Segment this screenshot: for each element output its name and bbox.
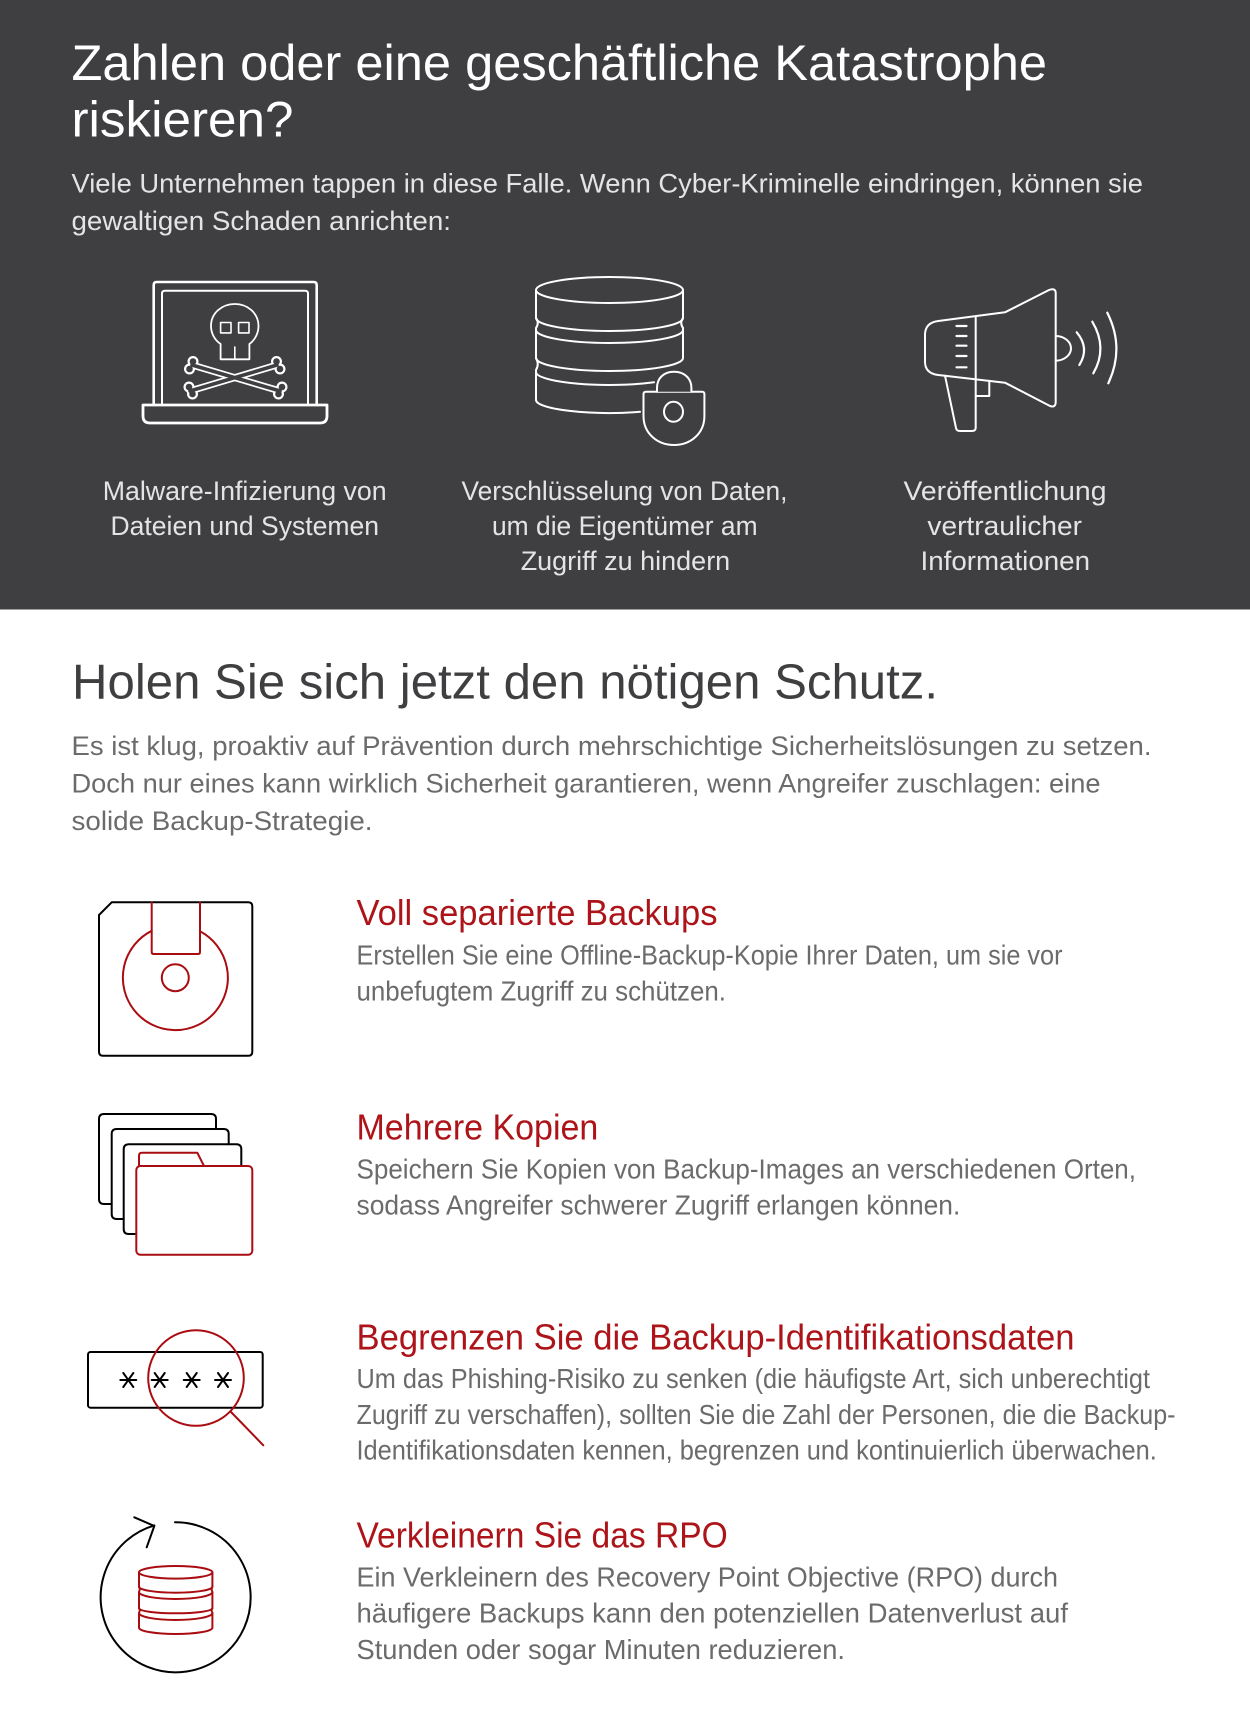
section: limit credentials — [356, 1316, 1176, 1466]
section: limit credentials: Identifikationsdaten kennen, begrenzen und kontinuierlich überwachen. — [356, 1435, 1157, 1466]
section: limit credentials: Begrenzen Sie die Backup-Identifikationsdaten — [356, 1316, 1074, 1357]
icon: password with magnifier — [88, 1330, 263, 1445]
caption: encryption — [462, 476, 788, 576]
intro paragraph: Doch nur eines kann wirklich Sicherheit garantieren, wenn Angreifer zuschlagen: eine — [72, 769, 1100, 799]
title: Zahlen oder eine geschäftliche Katastrophe — [72, 35, 1047, 91]
caption: malware: Malware-Infizierung von — [103, 476, 387, 506]
title: riskieren? — [72, 92, 294, 148]
intro text — [72, 168, 1143, 236]
section: reduce RPO — [356, 1515, 1068, 1665]
section: reduce RPO: Ein Verkleinern des Recovery Point Objective (RPO) durch — [356, 1562, 1058, 1593]
caption: encryption: Zugriff zu hindern — [521, 546, 730, 576]
caption: publication: Informationen — [920, 546, 1090, 576]
icon: stacked folders — [99, 1114, 252, 1255]
icon: database with padlock — [536, 277, 704, 445]
section: separated backups: Erstellen Sie eine Offline-Backup-Kopie Ihrer Daten, um sie vor — [356, 940, 1062, 970]
caption: encryption: um die Eigentümer am — [492, 511, 758, 541]
title — [72, 35, 1047, 148]
caption: encryption: Verschlüsselung von Daten, — [462, 476, 788, 506]
section: reduce RPO: häufigere Backups kann den potenziellen Datenverlust auf — [356, 1598, 1068, 1629]
section: limit credentials: Zugriff zu verschaffen), sollten Sie die Zahl der Personen, die die Backup- — [356, 1399, 1176, 1430]
icon: megaphone — [925, 289, 1116, 431]
section: reduce RPO: Stunden oder sogar Minuten reduzieren. — [356, 1634, 845, 1665]
section: multiple copies: Mehrere Kopien — [356, 1106, 598, 1147]
intro paragraph — [72, 731, 1152, 836]
section: multiple copies — [356, 1106, 1136, 1220]
section: separated backups: Voll separierte Backups — [356, 892, 718, 933]
intro paragraph: solide Backup-Strategie. — [72, 806, 372, 836]
caption: malware: Dateien und Systemen — [110, 511, 379, 541]
caption: publication — [904, 476, 1106, 576]
heading: protection: Holen Sie sich jetzt den nötigen Schutz. — [72, 655, 938, 709]
icon: rotating arrow around database — [101, 1517, 251, 1672]
intro text: gewaltigen Schaden anrichten: — [72, 206, 451, 236]
icon: floppy disk — [99, 902, 252, 1056]
intro text: Viele Unternehmen tappen in diese Falle. Wenn Cyber-Kriminelle eindringen, können sie — [72, 168, 1143, 198]
section: multiple copies: Speichern Sie Kopien von Backup-Images an verschiedenen Orten, — [356, 1153, 1136, 1184]
caption: publication: Veröffentlichung — [904, 476, 1106, 506]
section: limit credentials: Um das Phishing-Risiko zu senken (die häufigste Art, sich unberechtigt — [356, 1363, 1150, 1394]
intro paragraph: Es ist klug, proaktiv auf Prävention durch mehrschichtige Sicherheitslösungen zu setzen. — [72, 731, 1152, 761]
section: multiple copies: sodass Angreifer schwerer Zugriff erlangen können. — [356, 1189, 960, 1220]
panel: dark header — [0, 0, 1250, 610]
section: separated backups — [356, 892, 1062, 1007]
caption: publication: vertraulicher — [927, 511, 1082, 541]
caption: malware — [103, 476, 387, 541]
section: reduce RPO: Verkleinern Sie das RPO — [356, 1515, 728, 1556]
section: separated backups: unbefugtem Zugriff zu schützen. — [356, 976, 726, 1007]
icon: laptop with skull and crossbones — [143, 282, 327, 423]
